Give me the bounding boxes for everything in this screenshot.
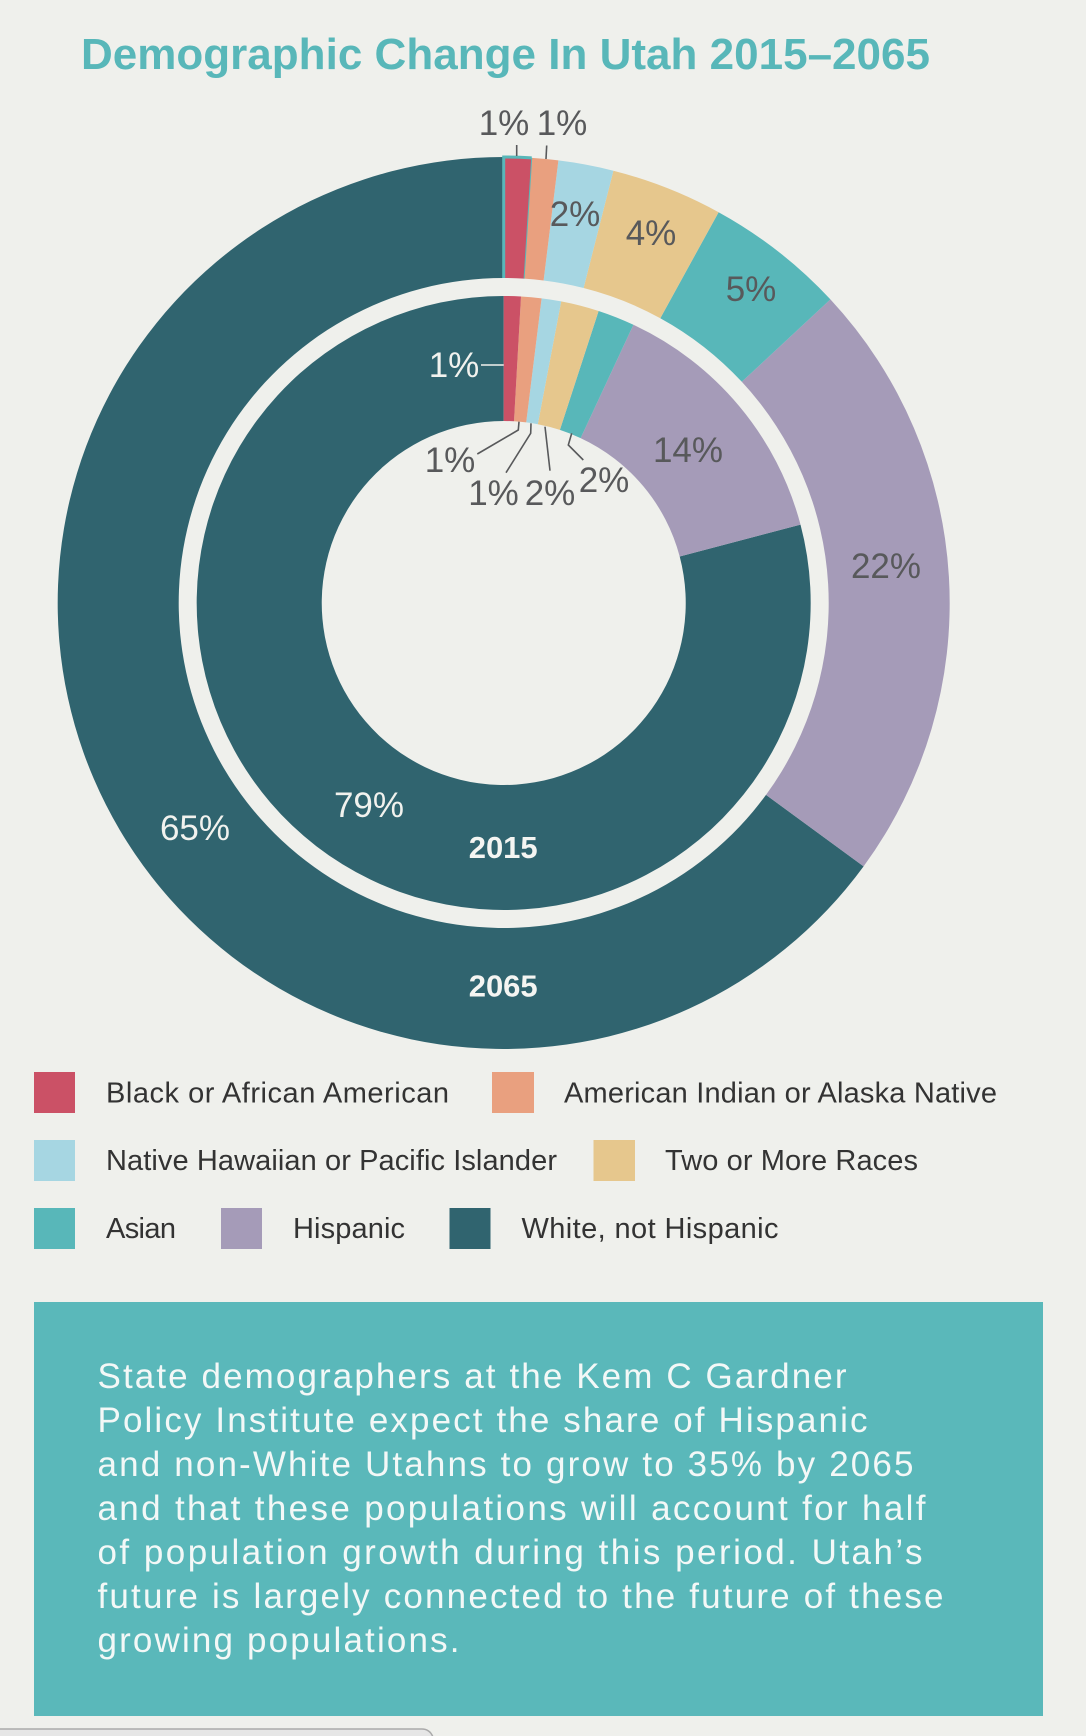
legend bbox=[34, 1072, 997, 1249]
segment 2065: Asian 5% bbox=[660, 212, 830, 382]
bottom tab bbox=[0, 1729, 434, 1736]
year label 2015: 2015 bbox=[469, 830, 538, 865]
percentage labels: 2015: 2% bbox=[579, 461, 629, 500]
legend item: Hispanic bbox=[221, 1208, 405, 1249]
percentage labels: 2015: 1% bbox=[429, 346, 479, 385]
legend item: Hispanic: Hispanic bbox=[293, 1213, 405, 1245]
percentage labels: 2065: 65% bbox=[160, 809, 230, 848]
leader lines bbox=[477, 145, 583, 473]
segment 2015: Native Hawaiian or Pacific Islander 1% bbox=[526, 298, 561, 424]
percentage labels: 2065: 4% bbox=[626, 214, 676, 253]
segment 2015: Asian 2% bbox=[560, 311, 633, 438]
callout text: and non-White Utahns to grow to 35% by 2065 bbox=[98, 1445, 914, 1484]
percentage labels: 2065: 2% bbox=[550, 195, 600, 234]
legend item: Black or African American: Black or African American bbox=[106, 1078, 449, 1110]
legend item: White, not Hispanic: White, not Hispanic bbox=[522, 1213, 778, 1245]
panel: callout bbox=[34, 1302, 1043, 1716]
chart: 2065 outer donut ring bbox=[58, 157, 950, 1049]
percentage labels: 2015: 1% bbox=[468, 474, 519, 513]
segment 2015: Hispanic 14% bbox=[581, 325, 800, 556]
legend item: Asian: Asian bbox=[106, 1213, 176, 1245]
percentage labels: 2065: 1% bbox=[537, 104, 587, 143]
legend item: Black or African American bbox=[34, 1072, 449, 1113]
percentage labels: 2015: 14% bbox=[653, 431, 723, 470]
title: Demographic Change In Utah 2015–2065 bbox=[81, 30, 930, 79]
segment 2065: Native Hawaiian or Pacific Islander 2% bbox=[544, 160, 613, 288]
callout text: Policy Institute expect the share of Hispanic bbox=[98, 1401, 868, 1440]
callout text: of population growth during this period. Utah’s bbox=[98, 1533, 923, 1572]
legend item: White, not Hispanic bbox=[450, 1208, 778, 1249]
percentage labels: 2065: 5% bbox=[726, 270, 776, 309]
chart: 2015 inner donut ring bbox=[197, 296, 811, 910]
callout text: State demographers at the Kem C Gardner bbox=[98, 1357, 847, 1396]
legend item: Native Hawaiian or Pacific Islander bbox=[34, 1140, 557, 1181]
callout text: future is largely connected to the future of these bbox=[98, 1577, 943, 1616]
segment 2015: White, not Hispanic 79% bbox=[197, 296, 811, 910]
legend item: American Indian or Alaska Native: American Indian or Alaska Native bbox=[564, 1078, 997, 1110]
segment 2015: Black or African American 1% bbox=[504, 296, 521, 421]
callout text: and that these populations will account for half bbox=[98, 1489, 926, 1528]
legend item: American Indian or Alaska Native bbox=[492, 1072, 997, 1113]
percentage labels: 2015: 1% bbox=[425, 441, 475, 480]
percentage labels: 2015: 2% bbox=[525, 474, 575, 513]
legend item: Two or More Races bbox=[594, 1140, 918, 1181]
year label 2065: 2065 bbox=[469, 968, 538, 1004]
legend item: Two or More Races: Two or More Races bbox=[665, 1145, 918, 1177]
segment 2065: Two or More Races 4% bbox=[584, 171, 719, 318]
percentage labels: 2015: 79% bbox=[334, 786, 404, 825]
segment 2015: American Indian or Alaska Native 1% bbox=[514, 296, 542, 422]
callout text bbox=[98, 1357, 943, 1660]
percentage labels: 2015 bbox=[334, 346, 723, 825]
legend item: Native Hawaiian or Pacific Islander: Native Hawaiian or Pacific Islander bbox=[106, 1145, 557, 1177]
percentage labels: 2065 bbox=[160, 104, 921, 848]
segment 2065: Black or African American 1% bbox=[504, 157, 532, 279]
callout text: growing populations. bbox=[98, 1621, 460, 1660]
percentage labels: 2065: 1% bbox=[479, 104, 529, 143]
segment 2065: White, not Hispanic 65% bbox=[58, 157, 864, 1049]
segment 2065: Hispanic 22% bbox=[742, 299, 950, 866]
segment 2065: American Indian or Alaska Native 1% bbox=[524, 158, 558, 280]
legend item: Asian bbox=[34, 1208, 176, 1249]
segment 2015: Two or More Races 2% bbox=[538, 301, 599, 430]
percentage labels: 2065: 22% bbox=[851, 547, 921, 586]
